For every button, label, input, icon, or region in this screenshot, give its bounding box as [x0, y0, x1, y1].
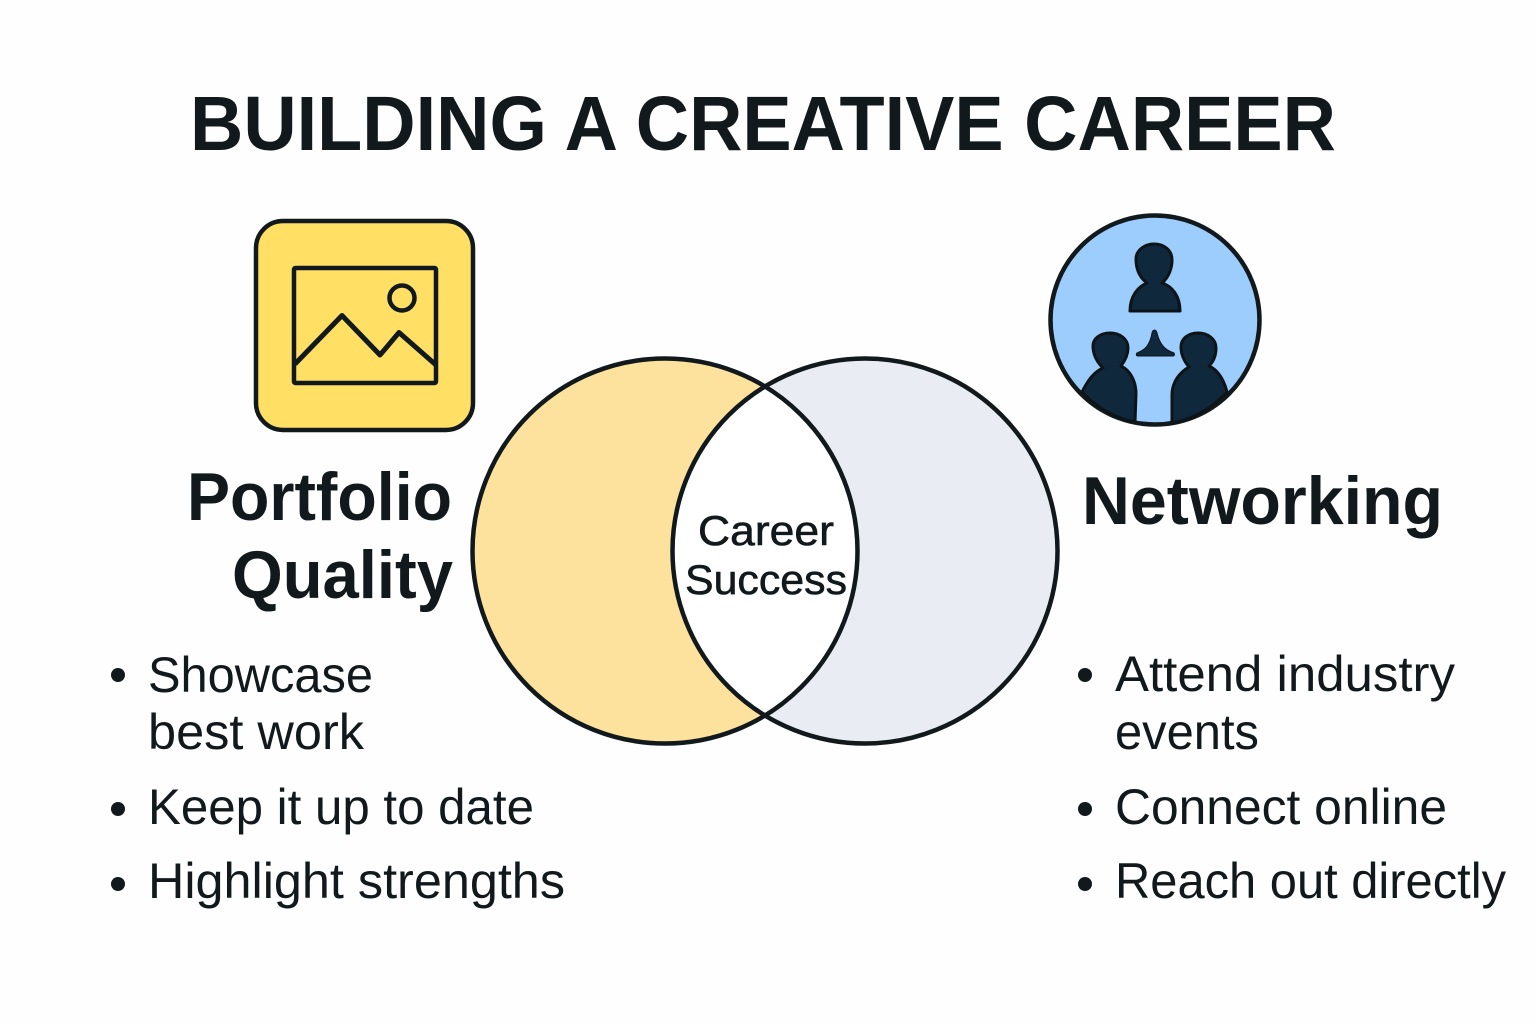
- heading: portfolio quality: Quality: [232, 537, 453, 613]
- list: portfolio points: Keep it up to date: [148, 779, 534, 835]
- list: portfolio points: Showcase: [148, 647, 373, 703]
- heading: portfolio quality: [187, 459, 453, 613]
- venn centre label: [685, 507, 847, 603]
- heading: portfolio quality: Portfolio: [187, 459, 452, 535]
- venn centre label: Career: [698, 507, 834, 554]
- title: BUILDING A CREATIVE CAREER: [190, 81, 1336, 167]
- connector triangle: [1136, 330, 1174, 356]
- venn centre label: Success: [685, 556, 847, 603]
- icon: networking people: [1050, 216, 1260, 424]
- list: networking points: Connect online: [1115, 779, 1447, 835]
- list: networking points: events: [1115, 704, 1259, 760]
- list: networking points: Attend industry: [1115, 646, 1455, 702]
- venn diagram: [472, 358, 1058, 744]
- person: top: [1130, 244, 1180, 311]
- list: portfolio points: [111, 647, 565, 909]
- heading: networking: Networking: [1082, 463, 1443, 539]
- list: networking points: Reach out directly: [1115, 853, 1506, 909]
- list: networking points: [1078, 646, 1506, 909]
- venn overlap: [672, 386, 858, 716]
- icon: portfolio image: [256, 221, 473, 430]
- person: bottom left: [1082, 333, 1136, 422]
- person: bottom right: [1172, 333, 1227, 423]
- list: portfolio points: best work: [148, 704, 365, 760]
- list: portfolio points: Highlight strengths: [148, 853, 565, 909]
